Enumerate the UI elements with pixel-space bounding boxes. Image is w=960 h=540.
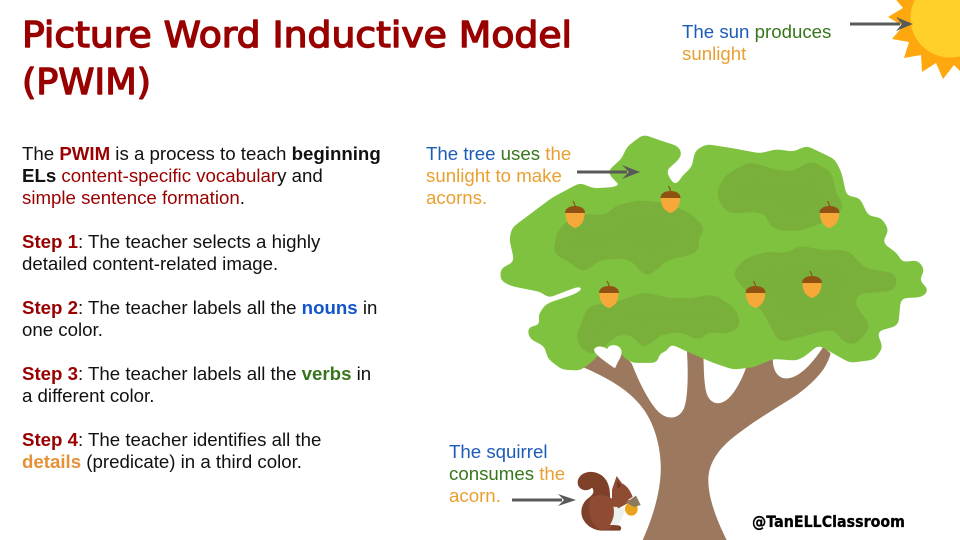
text: squirrel label: acorn. [449, 485, 501, 506]
text: step 2: Step 2: The teacher labels all the nouns in [22, 297, 377, 318]
arrow: to sun [850, 17, 913, 31]
text: tree label: sunlight to make [426, 165, 562, 186]
text block: introduction and steps [22, 143, 381, 472]
icon: squirrel [578, 472, 641, 531]
text: step 1: Step 1: The teacher selects a highly [22, 231, 320, 252]
text: PWIM definition: . [240, 187, 245, 208]
icon: acorn 5 [746, 281, 766, 308]
text: step 4: Step 4: The teacher identifies all the [22, 429, 321, 450]
title: (PWIM) [22, 62, 151, 103]
icon: acorn 1 [565, 201, 585, 228]
text: squirrel label: The squirrel [449, 441, 548, 462]
text: step 4: (predicate) in a third color. [86, 451, 302, 472]
tree foliage [501, 135, 929, 370]
title: Picture Word Inductive Model [22, 15, 572, 56]
icon: acorn 2 [660, 186, 680, 213]
arrow: to tree [577, 165, 640, 179]
text: tree label: The tree uses the [426, 143, 571, 164]
text: step 3: Step 3: The teacher labels all the verbs in [22, 363, 371, 384]
text: step 1: detailed content-related image. [22, 253, 278, 274]
icon: acorn 6 [802, 271, 822, 298]
text: PWIM definition: ELs [22, 165, 56, 186]
text: sun label: The sun produces [682, 21, 831, 42]
text: sun label: sunlight [682, 43, 747, 64]
title [22, 15, 572, 103]
text: squirrel label: consumes [449, 463, 534, 484]
text: PWIM definition: content-specific vocabulary and [61, 165, 323, 186]
text: step 4: details [22, 451, 81, 472]
heart-shaped gap [594, 345, 622, 367]
tree trunk [583, 347, 831, 540]
text: PWIM definition: simple sentence formation [22, 187, 240, 208]
icon: acorn 3 [820, 201, 840, 228]
text: step 3: a different color. [22, 385, 154, 406]
arrow: to squirrel [512, 494, 576, 506]
text: PWIM definition: The PWIM is a process to teach beginning [22, 143, 381, 164]
illustration: tree [501, 135, 929, 540]
text: squirrel label: the [539, 463, 565, 484]
icon: acorn 4 [599, 281, 619, 308]
text: step 2: one color. [22, 319, 103, 340]
icon: sun [888, 0, 960, 79]
handle: @TanELLClassroom: @TanELLClassroom [752, 512, 905, 531]
text: tree label: acorns. [426, 187, 487, 208]
